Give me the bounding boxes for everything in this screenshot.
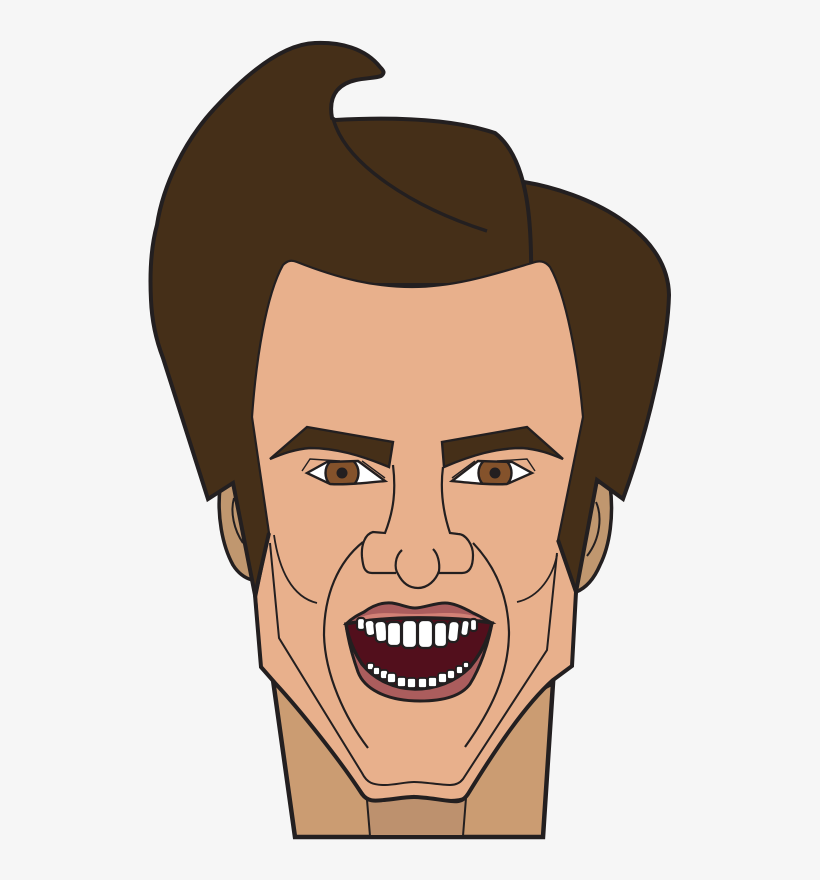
right eyebrow: [442, 427, 563, 467]
mouth interior: [346, 618, 492, 689]
right eye: [449, 458, 536, 486]
illustration: cartoon face portrait: [148, 40, 671, 840]
jaw outline: [255, 533, 576, 801]
face: [252, 261, 583, 801]
gums: [356, 613, 480, 635]
icon: right ear: [576, 480, 612, 592]
hair: parting line: [333, 118, 487, 231]
lower lip: [346, 623, 492, 701]
upper teeth: [357, 618, 477, 648]
smile lines: [274, 535, 557, 748]
lower teeth: [367, 662, 469, 688]
icon: left ear: [219, 482, 252, 580]
neck: [273, 680, 553, 837]
upper lip: [346, 603, 492, 640]
mouth: [346, 603, 492, 701]
inner jaw line: [270, 543, 557, 785]
hair: front quiff and left side: [151, 43, 531, 595]
left eyebrow: [270, 427, 393, 467]
nose: [362, 465, 473, 588]
hair: back right section: [520, 182, 669, 592]
left eye: [302, 458, 388, 486]
